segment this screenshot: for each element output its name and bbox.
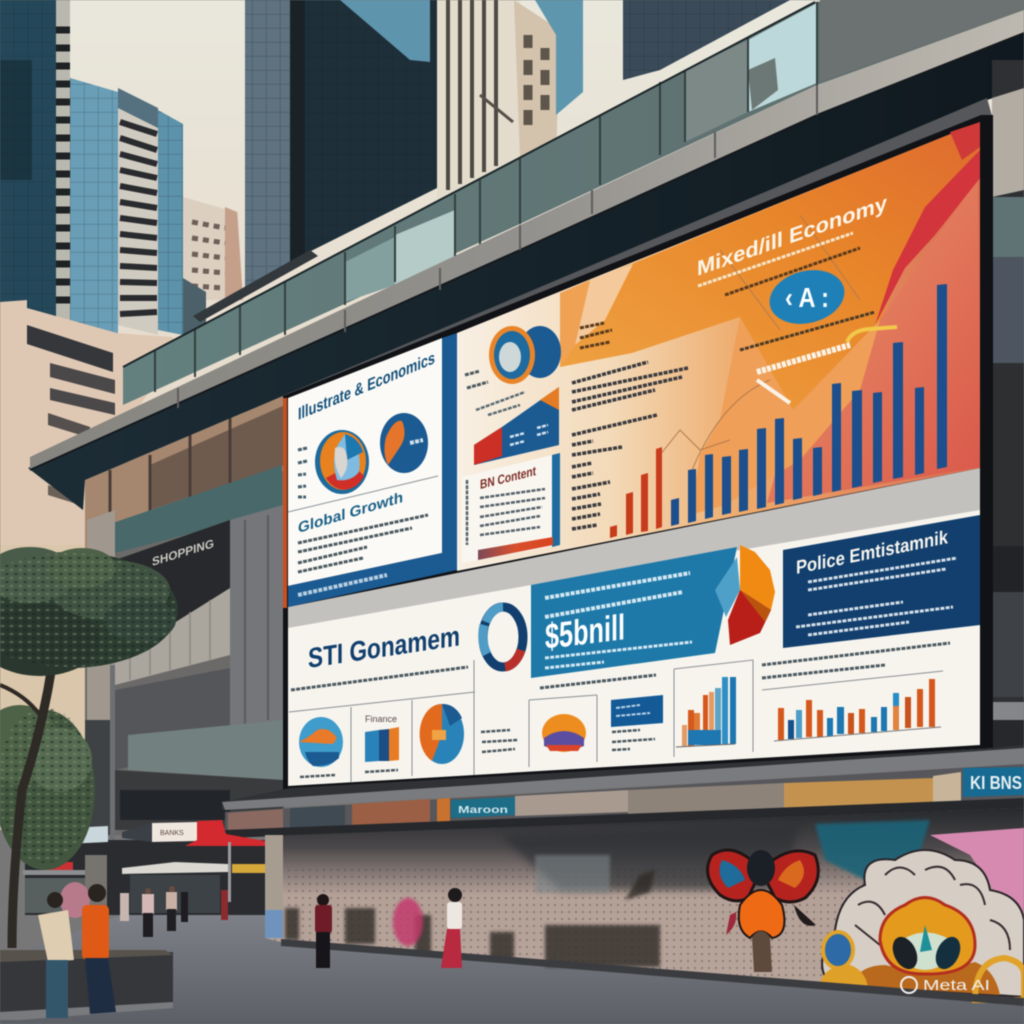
- heading: navy panel: Police Emtistamnik: [796, 527, 948, 579]
- store fronts on the left: [23, 820, 265, 915]
- dark underside of billboard: [222, 745, 1024, 810]
- mural wall: [265, 808, 1024, 1000]
- panel: white text box: [462, 453, 560, 563]
- mural: floral face: [820, 850, 1024, 1000]
- pie chart: multicolour circle: [315, 430, 369, 494]
- pie chart: navy circle: [380, 413, 428, 473]
- text block: chart intro: [540, 643, 950, 688]
- badge: blue pill: ‹ A :: [785, 282, 829, 313]
- pie chart: orange and red: [715, 545, 775, 645]
- mural: butterfly face: [708, 850, 818, 972]
- text block: small orange label: [580, 323, 612, 348]
- badge: blue pill: [764, 263, 850, 331]
- text block: lower intro: [291, 667, 468, 690]
- chart: stacked square: Finance: [365, 714, 397, 724]
- grey band between screens: [288, 468, 980, 630]
- panel: upper left white: [288, 333, 457, 607]
- text block: footer strip: [298, 575, 387, 595]
- tree: [0, 547, 178, 948]
- panel: lower screen: [288, 510, 980, 786]
- pie chart: top centre circle: [489, 326, 561, 384]
- callout: white text with swoosh: [757, 327, 897, 403]
- stat: big number: $5bnill: [545, 606, 625, 657]
- awning: red and white: [152, 820, 265, 846]
- text block: under blue box: [612, 730, 655, 750]
- ledge and storefront signs: [222, 748, 1024, 838]
- bar chart: small stacked bars: [676, 677, 736, 747]
- mid building facade: [85, 390, 285, 905]
- text block: small label near circle: [465, 371, 488, 388]
- planter: [0, 950, 173, 1020]
- mural: dark smudges: [285, 870, 660, 967]
- panel: upper right orange: [457, 122, 980, 571]
- panel: navy: [783, 515, 980, 648]
- heading: upper left: Illustrate & Economics: [298, 348, 435, 424]
- heading: orange banner: Mixed/ill Economy: [697, 190, 887, 281]
- column near storefronts: [265, 835, 283, 938]
- text block: banner subtitle: [698, 233, 875, 350]
- billboard: [283, 115, 993, 790]
- awning: red and white: BANKS: [160, 830, 184, 837]
- donut chart: [483, 607, 523, 667]
- sign: blue: [963, 767, 1024, 797]
- crowd in the distance: [60, 882, 228, 937]
- sign: shopping lettering: SHOPPING: [152, 536, 214, 569]
- icon: burger illustration: [542, 714, 586, 752]
- panel: blue centre: [531, 547, 737, 678]
- text block: navy panel copy: [796, 558, 957, 635]
- sign: teal: [451, 797, 515, 818]
- person: orange jacket: [82, 884, 116, 1014]
- text block: small lines: [300, 730, 518, 777]
- backdrop behind tree: [0, 545, 90, 830]
- watermark: Meta AI: [901, 977, 990, 994]
- person: dark red top: [315, 894, 332, 968]
- glass parapet level: [123, 0, 1024, 405]
- heading: global growth: Global Growth: [298, 489, 403, 537]
- sky: [0, 0, 1024, 560]
- billboard frame: [283, 115, 993, 790]
- left beige building: [0, 300, 173, 545]
- panel: small blue box: [611, 695, 663, 727]
- sign: teal: Maroon: [458, 805, 508, 816]
- heading: box: BN Content: [480, 463, 536, 492]
- text block: left body copy: [298, 515, 428, 572]
- chart: blue oval: [299, 717, 343, 767]
- heading: lower screen: STI Gonamem: [308, 620, 460, 674]
- mural: orange lower body: [850, 962, 1000, 995]
- text block: centre column: [572, 362, 688, 529]
- right wall: [992, 60, 1024, 760]
- ground: [0, 915, 1024, 1024]
- pie chart: orange round: [420, 704, 464, 764]
- person: beige shirt: [38, 892, 74, 1018]
- bar chart: rising bars: [610, 284, 947, 538]
- background towers: [0, 0, 790, 335]
- legend labels: [298, 448, 307, 497]
- person: white top and red trousers: [441, 888, 462, 968]
- roof canopy and soffit: [28, 10, 1024, 510]
- bar chart: long bars: [774, 679, 941, 741]
- text block: box copy: [467, 480, 545, 545]
- chart: stacked square: [365, 714, 399, 762]
- text block: blue panel copy: [545, 573, 692, 668]
- area chart panel: [474, 387, 559, 465]
- kerb: [281, 939, 1024, 1006]
- watermark: Meta AI: Meta AI: [923, 977, 990, 994]
